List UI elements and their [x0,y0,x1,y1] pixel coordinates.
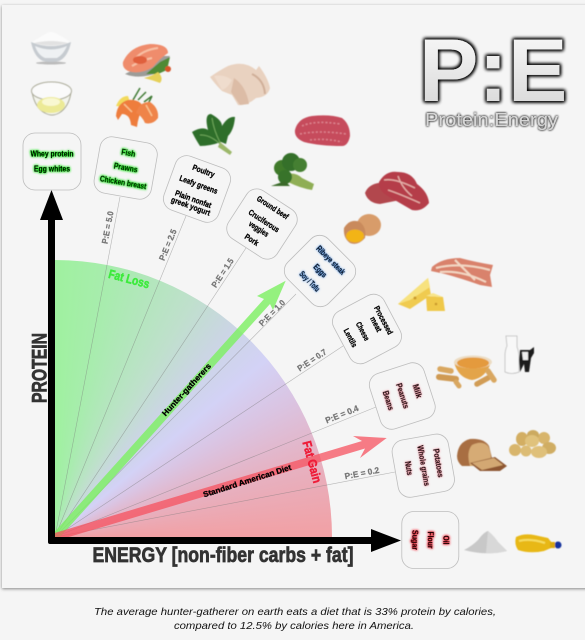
food box: P:E 1.5: veggies [247,219,271,239]
icon: flour pile [464,531,507,553]
icon: leafy greens [192,114,235,155]
food box: P:E 0.7 [328,290,406,368]
icon: ribeye steak [365,172,429,210]
food box: P:E 0.4: Peanuts [394,382,411,410]
icon: salmon steak [123,44,171,83]
food box: P:E 2.5 [160,152,234,226]
food box: P:E 2.5: Plain nonfat [174,189,213,210]
food box: P:E 1.0: Soy / Tofu [297,270,321,294]
icon: broccoli [271,153,314,190]
food box: P:E 0.2: Potatoes [431,448,445,479]
icon: milk bottle and cow [505,336,534,374]
icon: peanut butter and peanuts [439,356,494,386]
icon: cheese [398,278,445,311]
food box: P:E 0.2: Whole grains [415,445,431,487]
P:E ratio labels [99,210,380,481]
food box: P:E lowest: Sugar [410,530,419,550]
caption [94,606,496,632]
food box: P:E lowest: Flour [426,532,435,548]
icon: bacon [431,258,493,287]
subtitle: Protein:Energy: Protein:Energy [425,110,558,130]
caption: The average hunter-gatherer on earth eats a diet that is 33% protein by calories, [94,606,496,618]
food box: P:E 0.7: Processed [372,305,395,336]
food box: P:E 2.5: greek yogurt [170,195,212,218]
icon: ground beef [295,115,350,146]
axis label: protein: PROTEIN [28,333,52,403]
food box: P:E 0.4: Milk [411,383,424,400]
P:E ratio labels: P:E = 0.7 [295,347,329,373]
quadrant gradient: fat loss to fat gain [55,260,332,537]
food box: P:E 1.5: Ground beef [255,194,290,221]
label: hunter-gatherers: Hunter-gatherers [160,361,213,418]
food box: P:E lowest: Oil [441,536,450,544]
food box: P:E very high: Whey protein [30,150,74,158]
food box: P:E 0.7: Lentils [342,327,359,349]
food box: P:E 1.0: Eggs [312,263,329,280]
title: P:E: P:E [419,20,567,120]
icon: egg whites bowl [32,82,72,115]
P:E ratio labels: P:E = 2.5 [157,227,179,262]
caption: compared to 12.5% by calories here in America. [174,620,414,632]
label: fat gain: Fat Gain [300,439,324,485]
icon: potatoes [509,430,556,458]
food box: P:E 1.0 [279,230,361,312]
P:E ratio labels: P:E = 5.0 [99,210,116,245]
P:E ratio labels: P:E = 1.0 [257,298,287,328]
food box: P:E very high: Egg whites [34,164,70,174]
food box: P:E 5.0: Fish [121,148,136,159]
axis label: energy: ENERGY [non-fiber carbs + fat] [92,544,354,567]
food box: P:E 1.5: Cruciferous [247,208,281,235]
food box: P:E 5.0 [92,135,159,201]
icon: eggs [344,214,381,244]
icon: bread loaf [457,439,507,471]
food box: P:E 1.0: Ribeye steak [314,244,347,277]
icon: prawns [116,88,158,127]
arrow: standard American diet [54,436,387,541]
food box: P:E 5.0: Chicken breast [99,174,147,191]
label: fat loss: Fat Loss [107,267,151,291]
food box: P:E 0.2: Nuts [403,461,414,476]
food box: P:E very high [23,133,81,190]
icon: whey powder bowl [31,32,71,64]
radial P:E guide lines [55,197,395,537]
icon: oil bottle [515,534,562,552]
axis arrow: protein [40,190,63,544]
food box: P:E 0.4 [366,360,438,432]
axis arrow: energy [48,529,401,552]
P:E ratio labels: P:E = 0.4 [324,403,360,425]
arrow: hunter-gatherers [52,281,286,540]
food box: P:E lowest [402,512,459,568]
P:E ratio labels: P:E = 1.5 [209,256,236,289]
food box: P:E 0.7: Cheese [354,320,371,343]
food box: P:E 0.7: meat [368,315,384,334]
food box: P:E 1.5 [222,184,302,264]
food box: P:E 1.5: Pork [243,232,261,248]
food box: P:E 0.4: Beans [381,390,396,412]
food box: P:E 0.2 [390,432,456,499]
label: standard American diet: Standard American Diet [202,463,293,499]
food box: P:E 2.5: Poultry [191,163,216,179]
icon: raw chicken [210,64,270,105]
food box: P:E 2.5: Leafy greens [178,174,219,196]
food box: P:E 5.0: Prawns [113,161,139,175]
P:E ratio labels: P:E = 0.2 [344,465,380,481]
